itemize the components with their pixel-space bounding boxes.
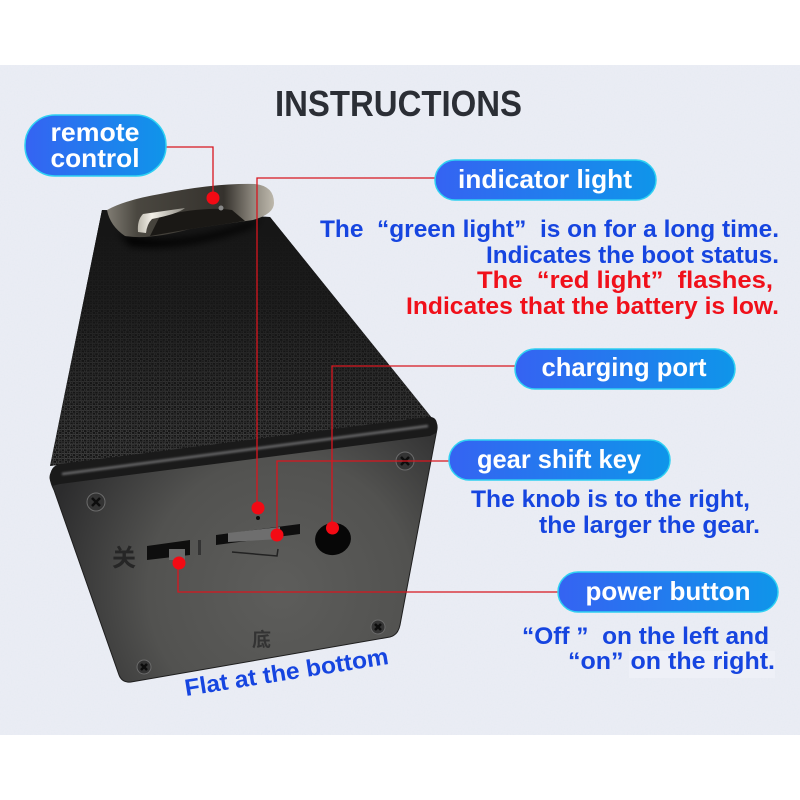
label: power button xyxy=(558,572,778,612)
screws xyxy=(87,452,414,674)
label: remote control xyxy=(25,115,166,176)
line: power button xyxy=(178,563,558,592)
line: gear shift key xyxy=(277,461,449,535)
charging port xyxy=(312,520,354,558)
text: indicator light description xyxy=(320,216,779,320)
text: indicator light description: Indicates that the battery is low. xyxy=(406,293,779,320)
remote lower dark band xyxy=(150,209,245,236)
remote body xyxy=(107,184,274,237)
text: indicator light description: The “red light” flashes, xyxy=(477,267,773,294)
title: INSTRUCTIONS xyxy=(275,83,522,124)
product: black box device xyxy=(40,205,440,682)
line: charging port xyxy=(332,366,515,528)
front edge highlight xyxy=(62,426,428,474)
label: charging port xyxy=(515,349,735,389)
label: power button: power button xyxy=(586,576,750,606)
text: indicator light description: The “green light” is on for a long time. xyxy=(320,216,779,243)
mesh top surface xyxy=(40,205,440,470)
label: indicator light xyxy=(435,160,656,200)
label: gear shift key xyxy=(449,440,670,480)
label: remote control: remote xyxy=(50,117,140,147)
label: charging port: charging port xyxy=(542,352,707,382)
front face panel xyxy=(50,420,437,682)
rounded rim band xyxy=(50,417,437,486)
power switch xyxy=(147,540,201,560)
remote shadow xyxy=(118,218,262,247)
printed characters on the panel: 关 xyxy=(112,545,136,572)
text: power button description: “on” on the right. xyxy=(568,648,775,675)
text: power button description: “Off ” on the left and xyxy=(522,623,769,650)
text: indicator light description: Indicates the boot status. xyxy=(486,242,779,269)
label: remote control: control xyxy=(50,143,140,173)
remote highlight xyxy=(138,208,185,233)
line: indicator light xyxy=(257,178,435,508)
connector lines and markers xyxy=(166,147,558,592)
label: gear shift key: gear shift key xyxy=(477,444,642,474)
text: gear shift description: The knob is to the right, xyxy=(471,486,750,513)
marker dots xyxy=(172,192,339,570)
remote control object xyxy=(107,184,274,247)
line: remote control xyxy=(166,147,213,198)
printed characters on the panel: 底 xyxy=(252,628,271,651)
text: gear shift description xyxy=(471,486,760,539)
indicator hole xyxy=(256,516,260,520)
printed characters on the panel xyxy=(112,545,271,651)
gear shift slot xyxy=(216,524,300,556)
text: power button description xyxy=(522,623,775,678)
text: gear shift description: the larger the gear. xyxy=(539,512,760,539)
label: indicator light: indicator light xyxy=(458,164,632,194)
caption: flat at the bottom: Flat at the bottom xyxy=(183,643,390,701)
